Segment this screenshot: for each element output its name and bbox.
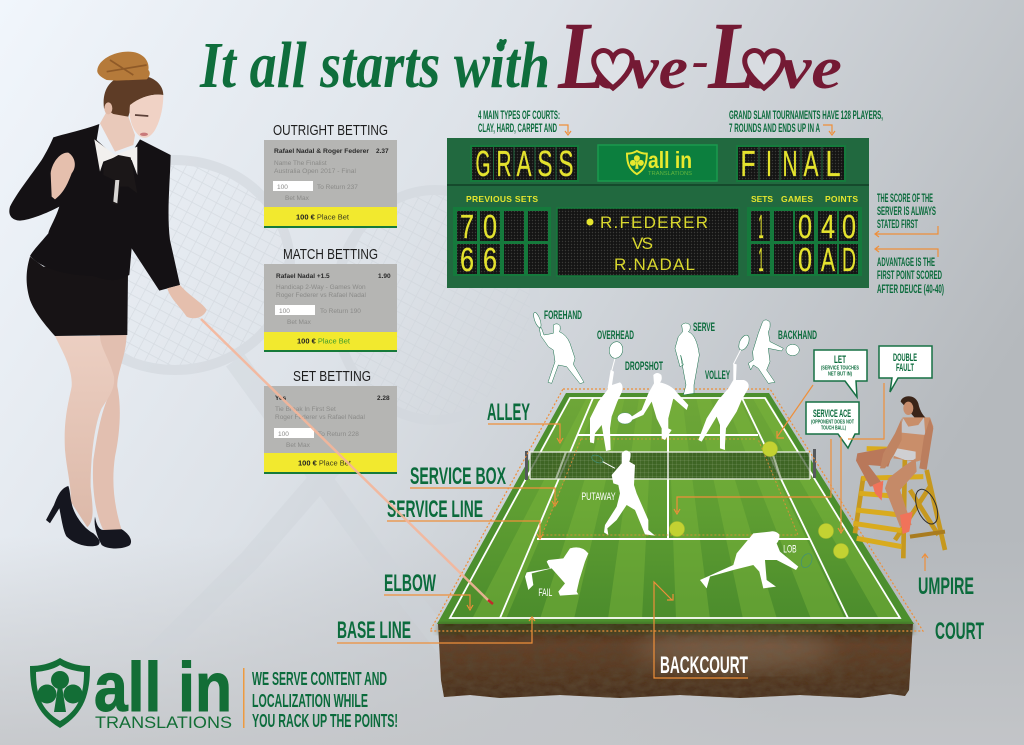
title: love-love: - [692,35,709,86]
jacket [9,124,180,291]
display: grass: R [496,143,512,184]
callout: let: NET BUT IN) [828,372,852,378]
title: love-love: ove [746,35,842,101]
label: elbow [384,570,473,610]
scoreboard annotations: SERVER IS ALWAYS [877,204,936,218]
player: putaway [581,450,655,536]
panel: outright betting: To Return 237 [317,184,358,191]
callout connector arrows [674,383,884,533]
board headings: PREVIOUS SETS [466,194,538,204]
grass [437,393,914,634]
scoreboard annotations: 4 MAIN TYPES OF COURTS: [478,108,560,122]
panel: outright betting: Rafael Nadal & Roger Federer [274,148,369,155]
board headings: GAMES [781,194,813,204]
logo: all in [94,648,232,726]
label: umpire [918,554,974,600]
display: final: A [804,143,818,184]
umpire woman [856,396,942,534]
player: lob [700,531,814,588]
panel: outright betting [264,122,397,228]
bottom logo and tagline [30,648,398,732]
panel: set betting [264,368,397,474]
score: sets games points: 0 [798,208,812,245]
title: love-love: L [707,2,756,109]
panel: match betting [264,246,397,352]
title: love-love [557,2,842,109]
player silhouettes: upper group [532,312,799,451]
player: dropshot [617,373,688,440]
stroke labels: OVERHEAD [597,328,634,342]
head [97,52,163,152]
scoreboard annotations: 7 ROUNDS AND ENDS UP IN A [729,121,820,135]
board headings: POINTS [825,194,858,204]
scoreboard annotations: CLAY, HARD, CARPET AND [478,121,557,135]
panel: match betting: 1.90 [378,273,391,280]
callout: double fault [879,346,932,392]
panel: set betting: 2.28 [377,395,390,402]
label: court: COURT [935,618,984,645]
previous sets: 6 [483,241,497,278]
label: alley [487,399,563,443]
score: sets games points: 0 [842,208,856,245]
score: sets games points: A [821,241,835,278]
panel: set betting: Roger Federer vs Rafael Nadal [275,414,366,421]
panel: outright betting: Bet Max [285,195,310,202]
player names: R.FEDERER [600,213,708,232]
title [199,2,842,109]
soil block [438,622,913,698]
panel: match betting: Handicap 2-Way - Games Won [276,284,366,291]
stroke labels [544,308,817,382]
panel: set betting: SET BETTING [293,368,371,385]
label: backcourt [654,582,748,679]
previous sets [453,207,551,278]
net [525,449,816,480]
label: alley: ALLEY [487,399,530,426]
panel: set betting: 100 [278,431,289,438]
panel: match betting: Bet Max [287,319,312,326]
rear leg [93,335,127,530]
callout: let: LET [834,354,846,366]
display: grass: S [538,143,552,184]
label: umpire: UMPIRE [918,573,974,600]
panel: set betting: 100 € Place Bet [298,458,352,468]
scoreboard annotations: THE SCORE OF THE [877,191,933,205]
callout: service ace [806,402,859,448]
logo panel: TRANSLATIONS [648,171,692,177]
player: overhead [590,341,624,451]
player silhouettes: lower group [525,450,814,599]
shoes [46,486,131,548]
title: love-love: L [557,2,606,109]
shirt and bow [94,139,137,205]
score: sets games points: 1 [758,208,764,245]
player names: R.NADAL [614,255,695,274]
panel: match betting: 100 [279,308,290,315]
player: volley [698,334,751,450]
panel: outright betting: Australia Open 2017 - Final [274,168,357,175]
title: it all starts with: It all starts with [199,29,550,102]
title: love-love: ove [596,35,688,101]
logo: TRANSLATIONS [95,713,232,732]
panel: outright betting: 100 [277,184,288,191]
umpire on chair [853,396,945,558]
scoreboard annotations: GRAND SLAM TOURNAMENTS HAVE 128 PLAYERS, [729,108,883,122]
court labels [337,399,984,679]
umpire chair [853,430,945,558]
tagline: YOU RACK UP THE POINTS! [252,711,398,731]
panel: match betting: 100 € Place Bet [297,336,351,346]
watermark: crossed tennis rackets [60,160,535,690]
player: serve [675,323,699,395]
logo panel: all in [648,147,692,173]
panel: outright betting: Name The Finalist [274,160,327,167]
tagline: LOCALIZATION WHILE [252,691,368,711]
label: backcourt: BACKCOURT [660,652,748,679]
display: grass [471,143,578,184]
pointer [201,319,493,604]
player names: VS [632,234,653,253]
callout: let [814,350,867,397]
player: fail: FAIL [538,587,552,599]
stroke labels: SERVE [693,320,715,334]
display: final: I [766,143,772,184]
panel: set betting: Tie Break In First Set [275,406,336,413]
display: final [737,143,845,184]
scoreboard [447,138,869,288]
scoreboard annotations [478,108,944,296]
tennis balls [670,442,848,558]
court lines [450,398,900,618]
score: sets games points [747,207,862,278]
player names [557,208,739,276]
scoreboard annotations: FIRST POINT SCORED [877,268,942,282]
player: putaway: PUTAWAY [581,491,616,503]
scoreboard annotations: ADVANTAGE IS THE [877,255,935,269]
panel: match betting: MATCH BETTING [283,246,378,263]
panel: outright betting: OUTRIGHT BETTING [273,122,388,139]
stroke labels: FOREHAND [544,308,582,322]
callout: let: (SERVICE TOUCHES [821,366,860,372]
label: base line [337,617,535,644]
stroke labels: BACKHAND [778,328,817,342]
hands [51,153,207,318]
betting panels [264,122,397,474]
display: grass: S [558,143,574,184]
board headings: SETS [751,194,773,204]
label: elbow: ELBOW [384,570,436,597]
player: forehand [532,312,584,384]
panel: outright betting: 2.37 [376,148,389,155]
score: sets games points: 1 [758,241,764,278]
display: final: L [826,143,840,184]
board headings [466,194,858,204]
callout: double fault: FAULT [896,362,914,374]
stroke labels: DROPSHOT [625,359,663,373]
previous sets: 7 [460,208,474,245]
label: base line: BASE LINE [337,617,411,644]
logo [30,648,232,732]
tennis court [430,389,923,698]
label: service line: SERVICE LINE [387,496,483,523]
woman with pointer [9,52,207,548]
score: sets games points: D [842,241,856,278]
label: service box: SERVICE BOX [410,463,506,490]
display: final: N [782,143,798,184]
panel: outright betting: 100 € Place Bet [296,212,350,222]
player: lob: LOB [783,544,797,556]
scoreboard annotations: AFTER DEUCE (40-40) [877,282,944,296]
callout: service ace: (OPPONENT DOES NOT [811,420,854,426]
logo panel [598,145,717,181]
scoreboard annotations: STATED FIRST [877,217,918,231]
panel: set betting: Yes [275,395,287,402]
score: sets games points: 4 [821,208,835,245]
dotted court outline [430,389,923,631]
panel: match betting: Rafael Nadal +1.5 [276,273,330,280]
previous sets: 0 [483,208,497,245]
callout: service ace: SERVICE ACE [813,408,851,420]
label: service box [410,463,558,506]
panel: set betting: To Return 228 [318,431,359,438]
tagline: WE SERVE CONTENT AND [252,669,387,689]
callout: service ace: TOUCH BALL) [821,426,846,432]
display: grass: G [476,143,490,184]
previous sets: 6 [460,241,474,278]
display: grass: A [516,143,532,184]
tagline [252,669,398,731]
panel: set betting: Bet Max [286,442,311,449]
stroke labels: VOLLEY [705,368,730,382]
panel: match betting: To Return 190 [320,308,361,315]
callout: double fault: DOUBLE [893,352,917,364]
player: fail [525,547,588,599]
front leg [55,336,114,527]
display: final: F [740,143,756,184]
player: backhand [748,320,799,383]
panel: match betting: Roger Federer vs Rafael Nadal [276,292,367,299]
score: sets games points: 0 [798,241,812,278]
label: service line [387,496,543,539]
skirt [27,257,128,336]
dotted service box outline [542,439,798,535]
